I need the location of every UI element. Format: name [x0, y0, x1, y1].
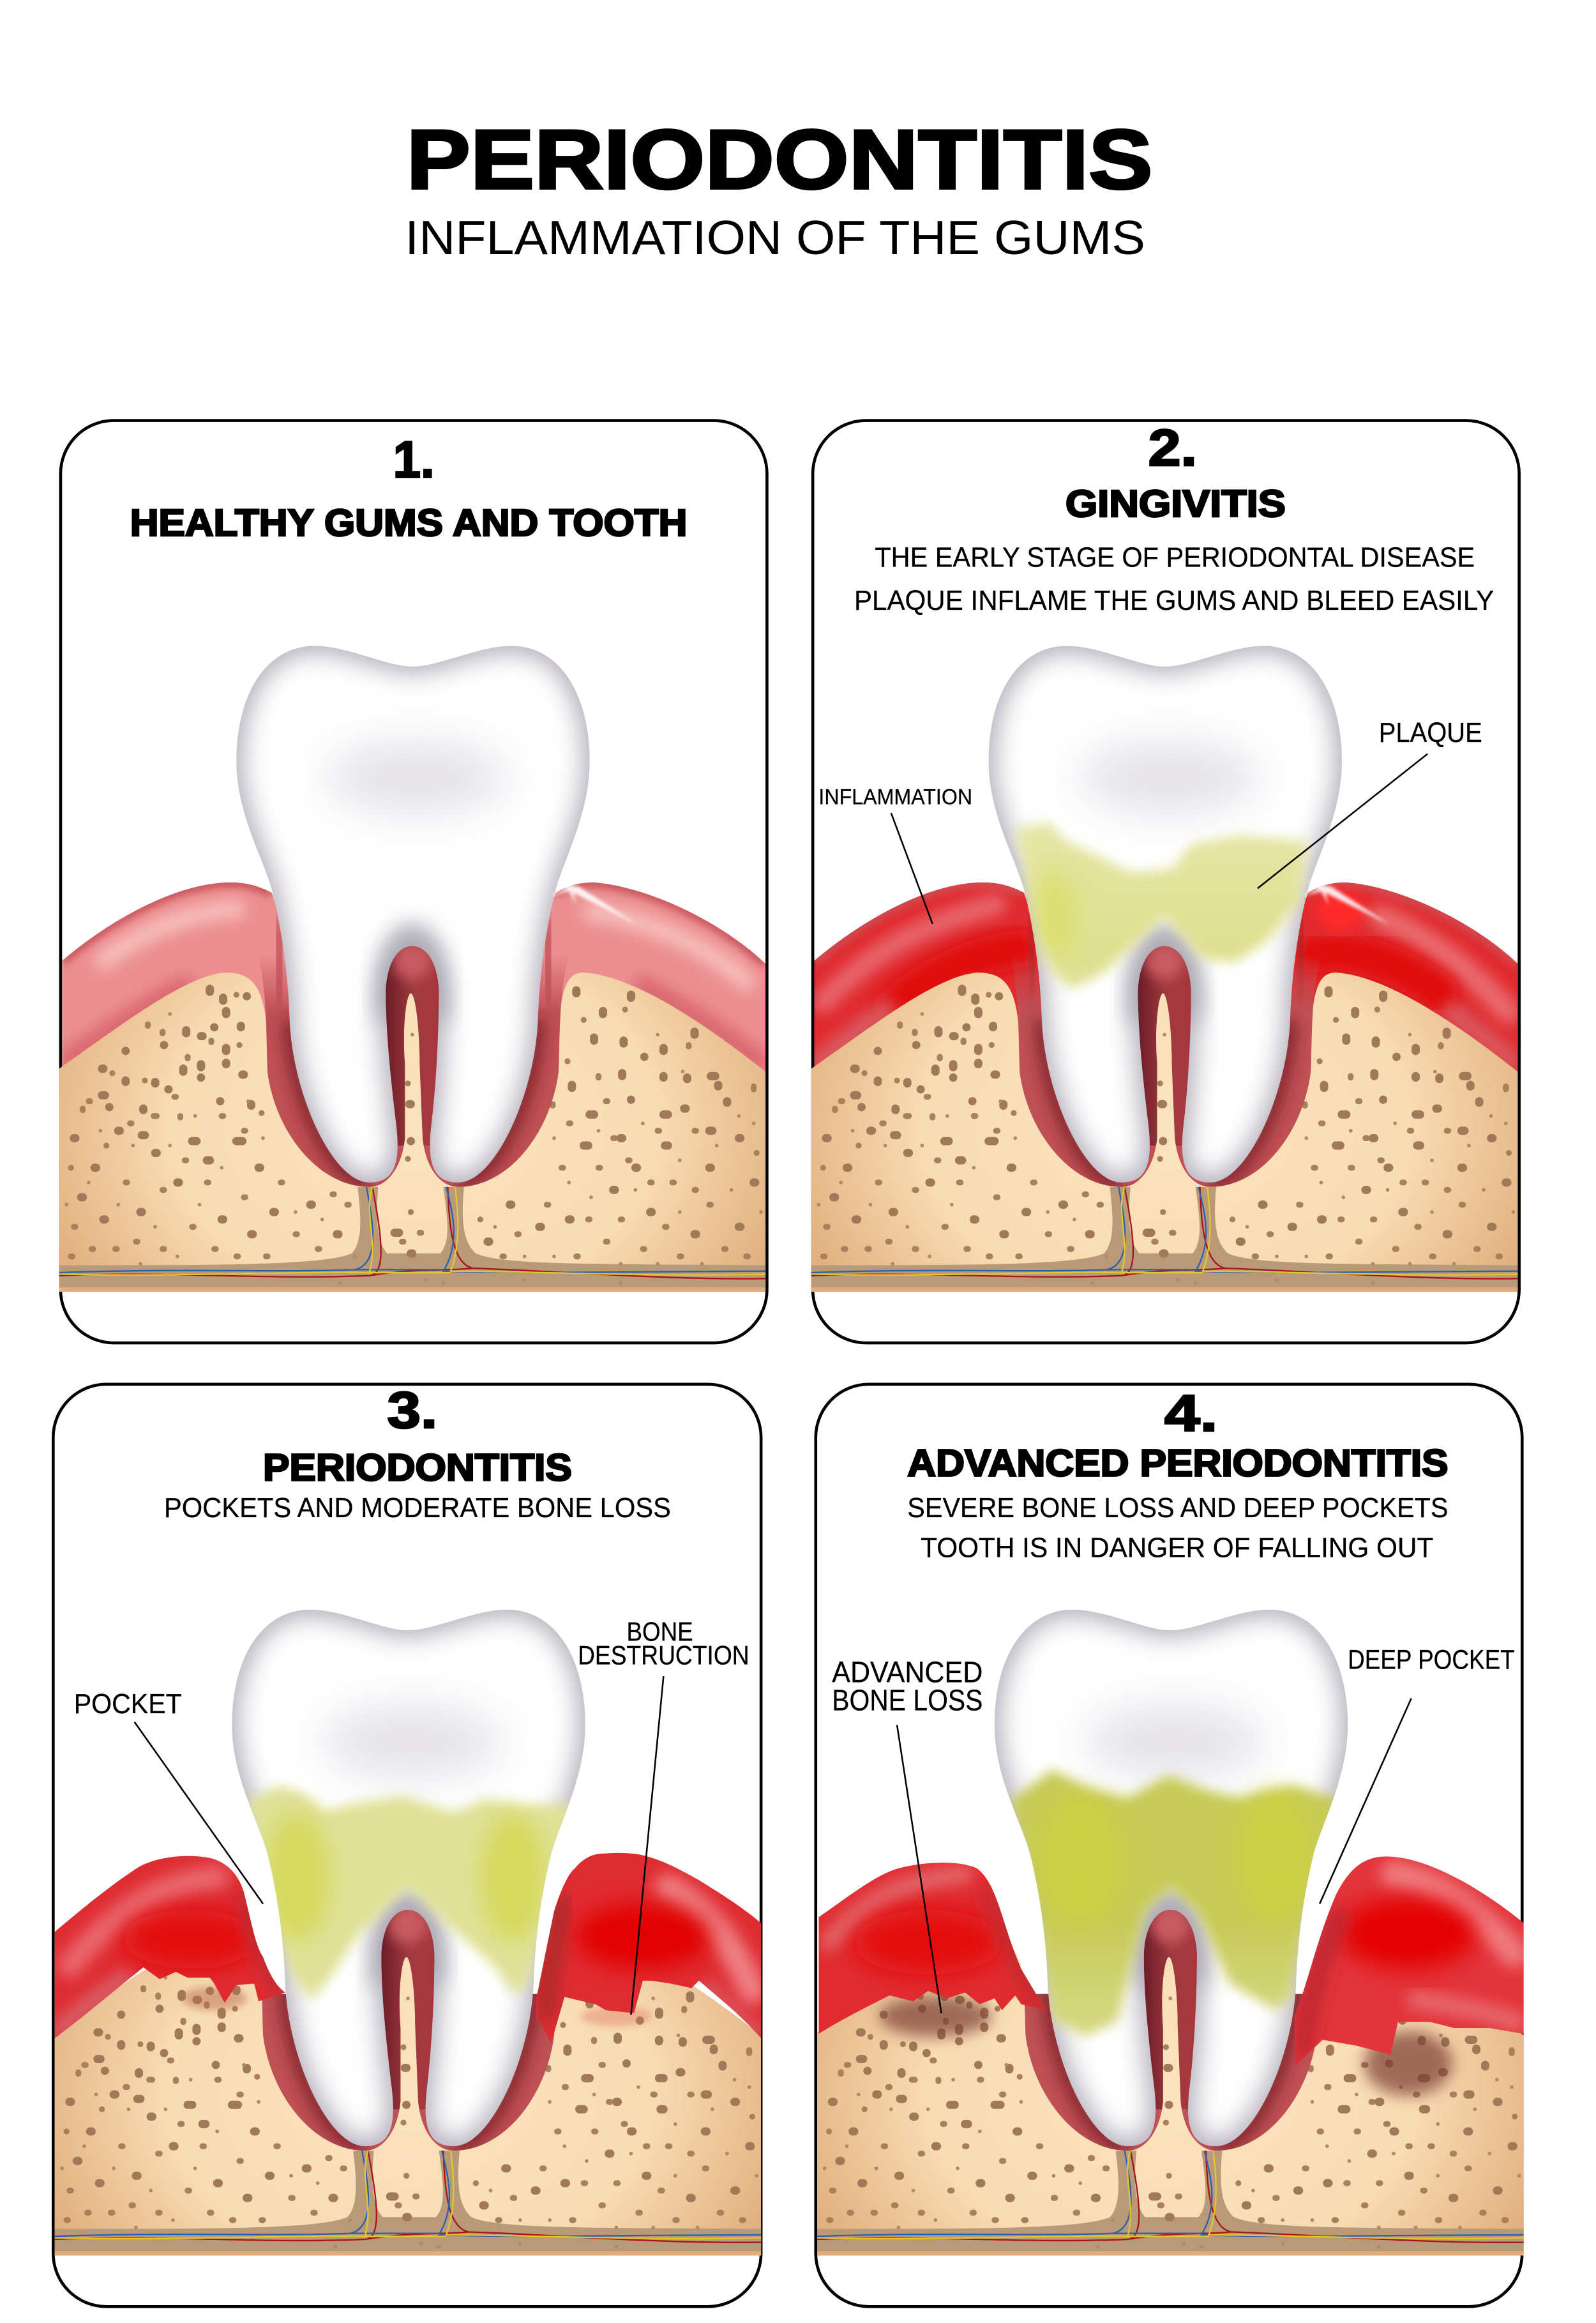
description line 2: PLAQUE INFLAME THE GUMS AND BLEED EASILY: [854, 585, 1494, 616]
bone: [817, 1936, 1524, 2255]
subtitle: INFLAMMATION OF THE GUMS: [405, 211, 1145, 264]
socket: [232, 1895, 587, 2161]
panel: gingivitis: [811, 420, 1521, 1343]
nerves: [811, 1187, 1517, 1279]
tooth: [980, 1600, 1364, 2161]
label: advanced bone loss: ADVANCED: [832, 1655, 982, 1688]
label: pocket: [74, 1688, 263, 1904]
tooth: [222, 635, 606, 1197]
panel border: [816, 1384, 1522, 2306]
label: deep pocket: DEEP POCKET: [1348, 1644, 1515, 1675]
bone damage left: [182, 1986, 247, 2010]
bone: [811, 972, 1517, 1292]
heading: gingivitis: GINGIVITIS: [1065, 483, 1286, 525]
plaque: [247, 1785, 579, 2000]
panel: healthy gums and tooth: [59, 421, 769, 1343]
illustration: tooth with advanced periodontitis: [814, 1600, 1526, 2255]
socket: [989, 931, 1343, 1197]
heading: healthy gums and tooth: HEALTHY GUMS AND TOOTH: [130, 502, 687, 544]
bone: [59, 972, 765, 1292]
label: bone destruction: [578, 1616, 749, 2015]
left gum: [814, 1856, 1058, 2041]
description line 1: THE EARLY STAGE OF PERIODONTAL DISEASE: [875, 542, 1475, 573]
label: plaque: PLAQUE: [1379, 717, 1482, 748]
label: plaque: [1258, 717, 1482, 888]
panel border: [813, 421, 1519, 1343]
illustration: tooth with periodontitis: [52, 1600, 764, 2255]
label: pocket: POCKET: [74, 1688, 182, 1720]
left gum inflamed: [815, 882, 1041, 1066]
number 3: 3.: [387, 1382, 437, 1439]
socket: [236, 931, 591, 1197]
bone damage left: [879, 1995, 991, 2037]
label: advanced bone loss: BONE LOSS: [832, 1683, 982, 1716]
socket: [995, 1895, 1349, 2161]
number 2: 2.: [1148, 420, 1197, 477]
description: POCKETS AND MODERATE BONE LOSS: [164, 1492, 671, 1524]
label: inflammation: INFLAMMATION: [818, 785, 972, 809]
description line 2: TOOTH IS IN DANGER OF FALLING OUT: [921, 1532, 1433, 1564]
right gum inflamed: [1291, 882, 1518, 1079]
label: bone destruction: BONE: [626, 1616, 693, 1646]
left gum: [62, 882, 289, 1066]
label: advanced bone loss: [832, 1655, 982, 2013]
heading: advanced periodontitis: ADVANCED PERIODONTITIS: [907, 1442, 1449, 1484]
gum highlight: [550, 881, 638, 925]
nerves: [55, 2151, 761, 2243]
right gum: [539, 882, 765, 1071]
bone damage right: [1364, 2031, 1452, 2096]
tooth: [974, 635, 1358, 1197]
description line 1: SEVERE BONE LOSS AND DEEP POCKETS: [907, 1492, 1449, 1524]
panel border: [61, 421, 767, 1343]
bone damage right: [581, 2006, 652, 2027]
number 1: 1.: [393, 432, 435, 489]
number 4: 4.: [1164, 1385, 1217, 1442]
plaque: [1011, 1769, 1342, 2037]
illustration: tooth with gingivitis: [811, 635, 1521, 1292]
bone: [55, 1936, 761, 2255]
heading: periodontitis: PERIODONTITIS: [263, 1446, 572, 1488]
gum highlight: [1302, 881, 1390, 925]
nerves: [59, 1187, 765, 1279]
label: inflammation: [818, 785, 972, 924]
panel border: [53, 1384, 761, 2306]
right gum: [1287, 1850, 1526, 2072]
title: PERIODONTITIS: [407, 112, 1153, 206]
tooth: [217, 1600, 601, 2161]
plaque: [1015, 822, 1308, 989]
left gum: [52, 1850, 296, 2050]
panel: periodontitis: [52, 1382, 764, 2306]
nerves: [817, 2151, 1524, 2243]
right gum: [527, 1848, 764, 2055]
panel: advanced periodontitis: [814, 1384, 1526, 2306]
label: bone destruction: DESTRUCTION: [578, 1640, 749, 1670]
illustration: healthy tooth: [59, 635, 769, 1292]
label: deep pocket: [1320, 1644, 1515, 1904]
